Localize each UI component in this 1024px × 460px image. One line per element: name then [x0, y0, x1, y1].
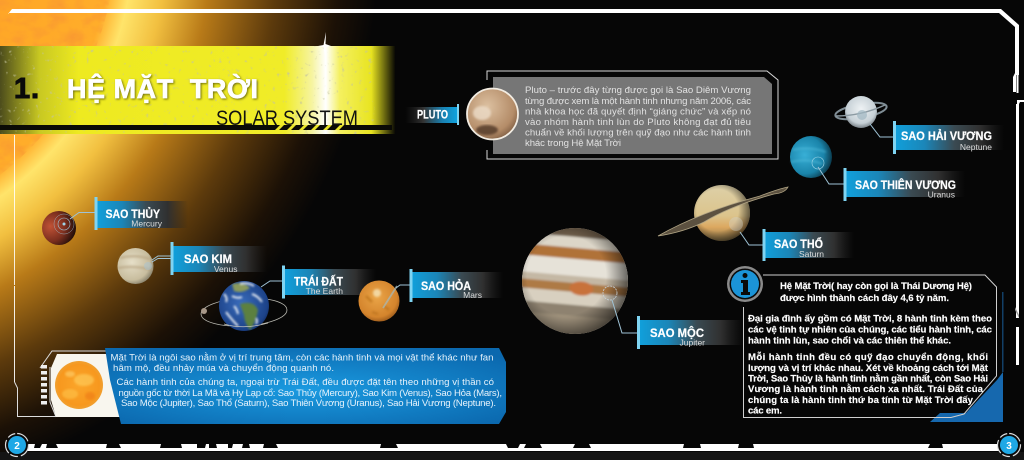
planet: uranus — [790, 136, 832, 178]
sun text — [110, 352, 502, 409]
label: jupiter: Jupiter — [679, 338, 705, 348]
sun text: hâm mộ, đều nhảy múa và chuyển động quanh nó. — [113, 363, 334, 374]
info text: Hệ Mặt Trời( hay còn gọi là Thái Dương Hệ) — [780, 281, 972, 292]
page number 3 — [998, 434, 1020, 456]
panel: sun description — [40, 348, 506, 424]
info text: Vương là hành tinh nằm cách xa nhất. Trái Đất của — [748, 383, 984, 395]
label: uranus: SAO THIÊN VƯƠNG — [855, 179, 956, 192]
pluto text: vào nhóm hành tinh lùn do Pluto không đạt đủ tiêu — [525, 117, 751, 128]
label: saturn: Saturn — [799, 249, 824, 259]
box outline — [744, 275, 996, 418]
blue text box — [105, 348, 506, 424]
sun text: Các hành tinh của chúng ta, ngoại trừ Trái Đất, đều được đặt tên theo những vị thần có — [116, 377, 494, 388]
label: earth: The Earth — [306, 286, 343, 296]
sun text: Mặt Trời là ngôi sao nằm ở vị trí trung tâm, còn các hành tinh và mọi vật thể khác như fan — [110, 352, 494, 364]
label: neptune: SAO HẢI VƯƠNG — [901, 130, 992, 143]
sparkle — [318, 32, 331, 56]
info text: lượng và vị trí khác nhau. Xét về khoảng cách tới Mặt — [748, 363, 989, 374]
subtitle: SOLAR SYSTEM — [216, 107, 358, 130]
planet: venus — [118, 248, 154, 284]
pluto text — [525, 85, 751, 149]
planet: mercury — [42, 211, 76, 245]
label: saturn: SAO THỔ — [774, 238, 823, 251]
info text: chúng ta là hành tinh thứ ba tính từ Mặt Trời đấy — [748, 395, 974, 406]
label: uranus — [818, 167, 965, 201]
info text: Đại gia đình ấy gồm có Mặt Trời, 8 hành tinh kèm theo — [748, 314, 992, 324]
page number 3: 3 — [1006, 441, 1012, 452]
pluto text: Pluto – trước đây từng được gọi là Sao Diêm Vương — [525, 85, 751, 96]
label: neptune — [870, 121, 1004, 154]
icon: pluto — [467, 88, 518, 140]
label: mercury — [70, 197, 188, 230]
label: mercury: Mercury — [131, 218, 163, 228]
section number: 1. — [14, 73, 39, 105]
info text — [748, 281, 993, 416]
planet: saturn — [658, 185, 788, 241]
planet: mars — [358, 280, 400, 322]
divider stripe with hazard marks — [0, 125, 392, 130]
page number 2: 2 — [14, 441, 20, 452]
bottom strip notches — [34, 444, 943, 448]
info text: các em. — [748, 406, 782, 416]
info text: Trời, Sao Thủy là hành tinh nằm gần nhất, còn Sao Hải — [748, 372, 988, 384]
pluto text: từng được xem là một hành tinh nhưng năm 2006, các — [525, 96, 751, 107]
pluto text: chuẩn về khối lượng trên quỹ đạo như các hành tinh — [525, 128, 751, 138]
page number 2 — [6, 434, 28, 456]
pluto label: PLUTO — [417, 110, 448, 122]
label: earth: TRÁI ĐẤT — [294, 276, 343, 288]
planet: jupiter — [522, 228, 628, 334]
title: HỆ MẶT TRỜI — [67, 73, 258, 104]
label: uranus: Uranus — [928, 190, 955, 200]
info text: các vệ tinh tự nhiên của chúng, các tiểu hành tinh, các — [748, 324, 993, 336]
label: earth — [261, 266, 376, 298]
sun text: nguồn gốc từ thời La Mã và Hy Lạp cổ: Sao Thủy (Mercury), Sao Kim (Venus), Sao Hỏa (Mars), — [118, 388, 502, 399]
pluto text: khác trong Hệ Mặt Trời — [525, 138, 621, 149]
sun frame — [40, 351, 120, 417]
panel: pluto — [467, 71, 778, 159]
label: saturn — [740, 229, 854, 261]
label: venus — [152, 242, 267, 275]
sun text: Sao Mộc (Jupiter), Sao Thổ (Saturn), Sao Thiên Vương (Uranus), Sao Hải Vương (Neptune). — [121, 398, 496, 409]
label: mercury: SAO THỦY — [106, 208, 160, 221]
pluto text: nhà khoa học đã quyết định “giáng chức” và xếp nó — [525, 106, 751, 118]
label: neptune: Neptune — [960, 142, 992, 152]
label: mars — [396, 269, 503, 302]
label: mars: Mars — [463, 290, 482, 300]
planet: earth — [200, 281, 288, 331]
label: jupiter — [612, 300, 744, 349]
info text: Mỗi hành tinh đều có quỹ đạo chuyển động, khối — [748, 352, 988, 363]
planet: neptune — [834, 96, 888, 128]
panel: info box — [727, 266, 1004, 422]
label: jupiter: SAO MỘC — [650, 327, 704, 340]
icon: info — [727, 266, 763, 302]
blue corner — [930, 372, 1003, 422]
title banner — [0, 32, 395, 134]
label: venus: SAO KIM — [184, 254, 232, 266]
label: mars: SAO HỎA — [421, 280, 471, 293]
icon: sun — [55, 361, 103, 409]
label: venus: Venus — [214, 264, 238, 274]
info text: hành tinh lùn, sao chổi và các thiên thể khác. — [748, 336, 951, 346]
info text: được hình thành cách đây 4,6 tỷ năm. — [780, 293, 949, 304]
pluto label — [405, 104, 459, 125]
